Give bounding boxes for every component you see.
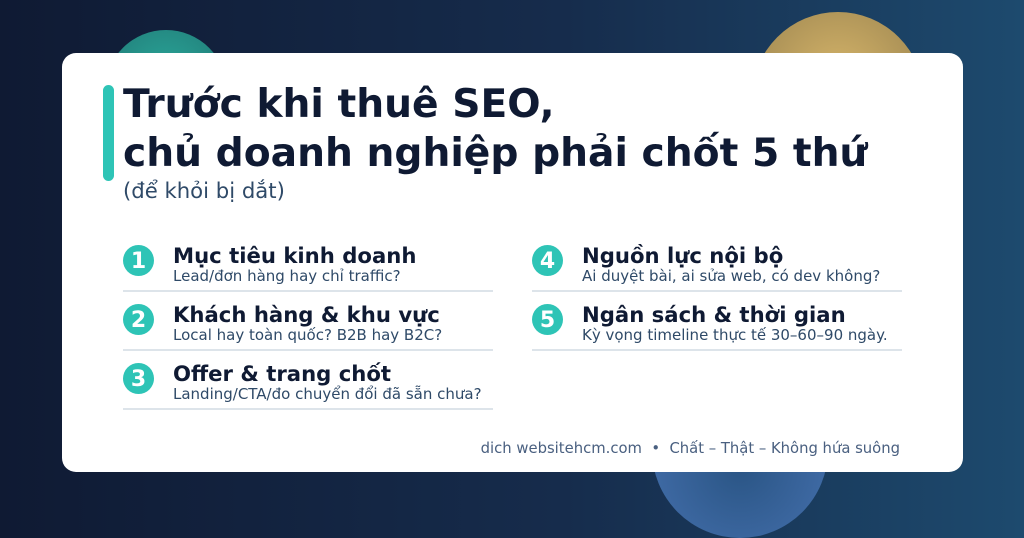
- item 4: Ai duyệt bài, ai sửa web, có dev không?: [582, 267, 880, 285]
- footer: dich websitehcm.com • Chất – Thật – Không hứa suông: [481, 440, 900, 457]
- item 1: 1: [131, 249, 146, 274]
- item 2: Khách hàng & khu vực: [173, 302, 440, 327]
- item 1: Mục tiêu kinh doanh: [173, 243, 416, 268]
- decorative circle gold: [752, 12, 924, 184]
- accent bar: [103, 85, 114, 181]
- title: [123, 82, 868, 176]
- card: [62, 53, 963, 472]
- item 4: [532, 243, 902, 292]
- item 5: [532, 302, 902, 351]
- item 5: Kỳ vọng timeline thực tế 30–60–90 ngày.: [582, 326, 888, 344]
- item 3: [123, 361, 493, 410]
- item 1: Lead/đơn hàng hay chỉ traffic?: [173, 267, 401, 285]
- item 2: Local hay toàn quốc? B2B hay B2C?: [173, 326, 442, 344]
- title: Trước khi thuê SEO,: [123, 82, 555, 127]
- item 1: [123, 243, 493, 292]
- item 4: Nguồn lực nội bộ: [582, 243, 783, 268]
- item 5: Ngân sách & thời gian: [582, 302, 846, 327]
- item 3: Landing/CTA/đo chuyển đổi đã sẵn chưa?: [173, 385, 482, 403]
- decorative circle blue: [652, 362, 828, 538]
- item 3: Offer & trang chốt: [173, 361, 391, 386]
- subtitle: (để khỏi bị dắt): [123, 178, 285, 203]
- item 4: 4: [540, 249, 555, 274]
- item 5: 5: [540, 308, 555, 333]
- decorative circle teal: [105, 30, 227, 152]
- item 2: [123, 302, 493, 351]
- title: chủ doanh nghiệp phải chốt 5 thứ: [123, 131, 867, 176]
- item 3: 3: [131, 367, 146, 392]
- item 2: 2: [131, 308, 146, 333]
